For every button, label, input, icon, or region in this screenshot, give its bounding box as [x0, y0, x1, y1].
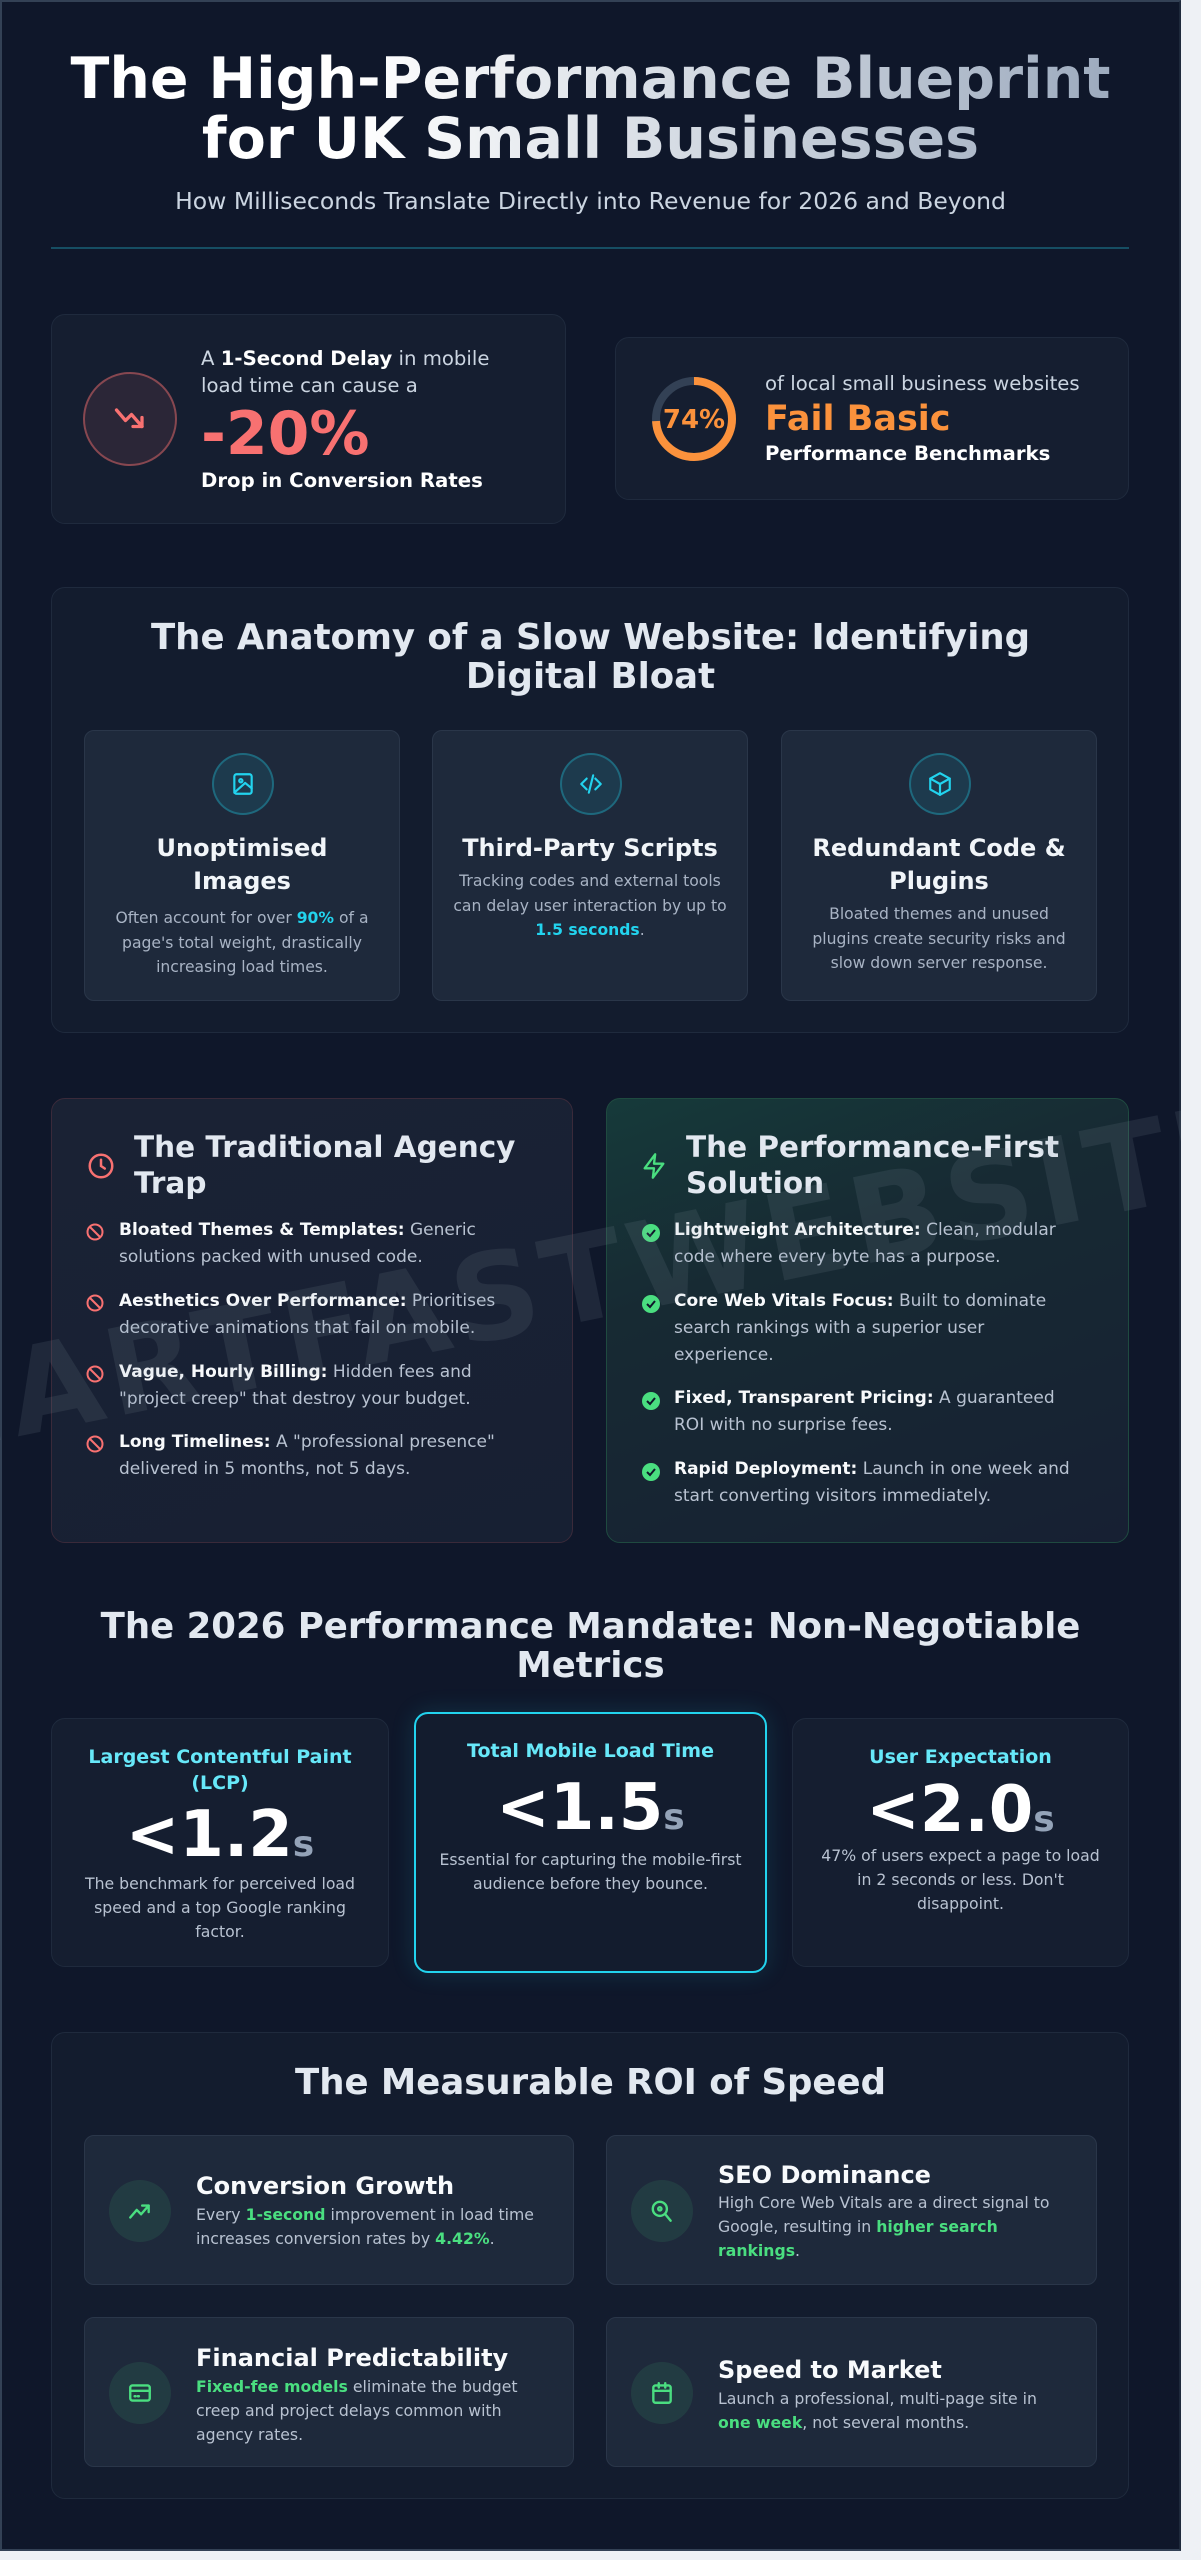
heading: The Traditional Agency	[134, 1130, 515, 1164]
donut chart 74%	[652, 377, 736, 461]
stat text: Fail Basic	[765, 399, 951, 439]
heading: anatomy	[151, 617, 1030, 697]
roi card: conversion growth: Every 1-second improvement in load time increases conversion rates by 4.42%.	[196, 2205, 534, 2248]
roi card: financial predictability	[84, 2317, 574, 2467]
icon: box	[909, 753, 971, 815]
metric card: LCP: (LCP)	[191, 1772, 249, 1794]
metric card: user expectation	[792, 1718, 1129, 1967]
title	[0, 49, 1181, 169]
list: solution benefits	[642, 1220, 1070, 1506]
stat card: 74% fail	[615, 337, 1129, 500]
metric card: LCP: The benchmark for perceived load speed and a top Google ranking factor.	[85, 1874, 355, 1941]
metric card: LCP: <1.2s	[126, 1798, 314, 1872]
roi card: speed to market: Speed to Market	[718, 2356, 942, 2384]
heading: ROI: The Measurable ROI of Speed	[295, 2062, 886, 2103]
card: third-party scripts: Tracking codes and external tools can delay user interaction by up to 1.5 seconds.	[453, 872, 727, 939]
roi card: conversion growth: Conversion Growth	[196, 2172, 454, 2200]
title: The High-Performance Blueprint	[70, 46, 1111, 112]
title: for UK Small Businesses	[202, 106, 979, 172]
roi card: conversion growth	[84, 2135, 574, 2285]
heading: anatomy: Digital Bloat	[466, 656, 715, 697]
stat card: conversion drop	[51, 314, 566, 524]
icon: clock	[88, 1154, 114, 1178]
card: unoptimised images: Unoptimised	[157, 834, 327, 862]
icon: calendar	[631, 2362, 693, 2424]
roi card: financial predictability: Financial Predictability	[196, 2344, 508, 2372]
list: solution benefits: Rapid Deployment: Launch in one week and start converting visitors immediately.	[674, 1459, 1070, 1506]
metric card: user expectation: <2.0s	[866, 1773, 1055, 1847]
card: unoptimised images: Images	[193, 867, 291, 895]
metric card: total mobile load time: Total Mobile Load Time	[467, 1740, 714, 1762]
card: redundant code: Bloated themes and unused plugins create security risks and slow down server response.	[812, 905, 1066, 972]
card: third-party scripts	[432, 730, 748, 1001]
roi card: SEO dominance: High Core Web Vitals are a direct signal to Google, resulting in higher search rankings.	[718, 2193, 1049, 2260]
panel: traditional agency trap	[51, 1098, 573, 1543]
icon: code	[560, 753, 622, 815]
icon: image	[212, 753, 274, 815]
list: agency problems: Aesthetics Over Performance: Prioritises decorative animations that fail on mobile.	[119, 1291, 495, 1338]
icon: trending up	[109, 2180, 171, 2242]
metric card: total mobile load time: <1.5s	[496, 1771, 685, 1845]
card: unoptimised images: Often account for over 90% of a page's total weight, drastically increasing load times.	[115, 909, 369, 976]
stat text: of local small business websites	[765, 372, 1080, 395]
stat text: load time can cause a	[201, 374, 418, 397]
list: solution benefits: Core Web Vitals Focus: Built to dominate search rankings with a superior user experience.	[674, 1291, 1046, 1365]
heading: Solution	[686, 1166, 824, 1200]
metric card: total mobile load time	[414, 1712, 767, 1973]
list: solution benefits: Fixed, Transparent Pricing: A guaranteed ROI with no surprise fees.	[674, 1388, 1055, 1435]
stat text	[201, 347, 490, 492]
card: redundant code: Redundant Code &	[812, 834, 1066, 862]
card: unoptimised images	[84, 730, 400, 1001]
icon: search	[631, 2180, 693, 2242]
heading: performance mandate: Metrics	[516, 1645, 665, 1686]
metric card: user expectation: User Expectation	[869, 1746, 1052, 1768]
icon: wallet	[109, 2362, 171, 2424]
list: agency problems: Vague, Hourly Billing: Hidden fees and "project creep" that destroy your budget.	[119, 1362, 472, 1409]
icon: trending down	[83, 372, 177, 466]
roi card: speed to market: Launch a professional, multi-page site in one week, not several months.	[718, 2389, 1037, 2432]
stat text: Performance Benchmarks	[765, 442, 1050, 465]
icon: lightning	[644, 1153, 664, 1179]
stat text	[765, 372, 1080, 465]
list: agency problems: Bloated Themes & Templates: Generic solutions packed with unused code.	[119, 1220, 476, 1267]
metric card: LCP: Largest Contentful Paint	[88, 1746, 352, 1768]
heading: performance mandate: The 2026 Performance Mandate: Non-Negotiable	[101, 1606, 1080, 1647]
heading	[686, 1130, 1059, 1200]
roi card: financial predictability: Fixed-fee models eliminate the budget creep and project delays common with agency rates.	[196, 2377, 518, 2444]
panel: measurable ROI	[51, 2032, 1129, 2499]
list: solution benefits: Lightweight Architecture: Clean, modular code where every byte has a purpose.	[674, 1220, 1056, 1267]
heading: anatomy: The Anatomy of a Slow Website: Identifying	[151, 617, 1030, 658]
roi card: speed to market	[606, 2317, 1097, 2467]
stat text: Drop in Conversion Rates	[201, 469, 483, 492]
stat text: -20%	[201, 399, 370, 469]
list: agency problems	[86, 1220, 495, 1479]
heading: The Performance-First	[686, 1130, 1059, 1164]
heading: Trap	[134, 1166, 206, 1200]
metric card: total mobile load time: Essential for capturing the mobile-first audience before they bounce.	[439, 1850, 742, 1893]
roi card: SEO dominance	[606, 2135, 1097, 2285]
heading: performance mandate	[100, 1606, 1080, 1686]
card: redundant code: Plugins	[889, 867, 989, 895]
card: redundant code	[781, 730, 1097, 1001]
card: third-party scripts: Third-Party Scripts	[462, 834, 718, 862]
panel: performance-first solution	[606, 1098, 1129, 1543]
list: agency problems: Long Timelines: A "professional presence" delivered in 5 months, not 5 days.	[119, 1432, 495, 1479]
donut chart 74%: 74%	[663, 405, 725, 435]
metric card: LCP	[51, 1718, 389, 1967]
panel: anatomy of a slow website	[51, 587, 1129, 1033]
roi card: SEO dominance: SEO Dominance	[718, 2161, 931, 2189]
stat text: A 1-Second Delay in mobile	[201, 347, 490, 370]
heading	[134, 1130, 515, 1200]
metric card: user expectation: 47% of users expect a page to load in 2 seconds or less. Don't disappoint.	[821, 1846, 1100, 1913]
subtitle: How Milliseconds Translate Directly into Revenue for 2026 and Beyond	[175, 187, 1006, 215]
